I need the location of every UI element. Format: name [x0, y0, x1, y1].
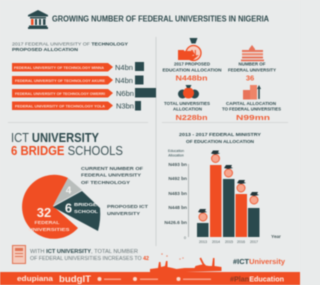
- icon: certificate: [12, 246, 26, 264]
- row: Yola: [12, 101, 141, 110]
- slice: 6 bridge school: [53, 191, 100, 231]
- y axis: N426.6 bn: [164, 220, 187, 226]
- heading: technology allocation: 2017 FEDERAL UNIVERSITY OF TECHNOLOGY: [12, 42, 129, 48]
- stat: capital allocation: TO FEDERAL UNIVERSITIES: [222, 106, 281, 112]
- row: Owerri: N6bn: [116, 89, 134, 98]
- y axis: Education: [168, 149, 184, 153]
- stat: number of federal university: NUMBER OF: [238, 62, 266, 66]
- pie chart: bridge schools: UNIVERSITIES: [28, 227, 70, 232]
- row: Minna: N4bn: [115, 63, 133, 72]
- x axis labels: Year: [271, 234, 281, 239]
- hashtag: ICT University: #ICTUniversity: [233, 259, 285, 266]
- y axis: N493 bn: [168, 162, 187, 168]
- row: Akure: FEDERAL UNIVERSITY OF TECHNOLOGY AKURE: [15, 79, 106, 83]
- icon: hand with money bag: N: [191, 49, 197, 58]
- callout: total federal universities increases to 42: OF FEDERAL UNIVERSITIES INCREASES TO 42: [30, 256, 149, 262]
- bars: [197, 165, 260, 237]
- callout: total federal universities increases to 42: [12, 246, 149, 264]
- chart title: OF EDUCATION ALLOCATION: [186, 139, 255, 145]
- icon: money stacks and arrow: [243, 85, 261, 100]
- footer logos: edupiana: [17, 276, 53, 283]
- icon: government building: [28, 10, 48, 29]
- stat: capital allocation: CAPITAL ALLOCATION: [226, 101, 276, 106]
- y axis: 0: [184, 236, 186, 240]
- stat: capital allocation: N99mn: [236, 115, 270, 122]
- label: proposed ICT university: PROPOSED ICT: [107, 204, 148, 210]
- y axis: N492 bn: [168, 176, 187, 182]
- icon: university building: [241, 45, 264, 61]
- footer crowd silhouette: [150, 253, 222, 273]
- footer logos: [17, 274, 91, 285]
- x axis labels: 2015: [225, 240, 233, 244]
- slice: 32 federal universities: [22, 175, 78, 239]
- subheading: proposed allocation: PROPOSED ALLOCATION: [12, 47, 79, 53]
- stat: total universities allocation: TOTAL UNIVERSITIES: [164, 101, 210, 106]
- pie chart: bridge schools: FEDERAL: [34, 220, 60, 225]
- chart title: [179, 132, 262, 145]
- row: Owerri: [12, 88, 156, 98]
- y axis: N448 bn: [168, 205, 187, 211]
- footer bar: [0, 272, 300, 285]
- row: Yola: N3bn: [116, 102, 134, 110]
- label: proposed ICT university: [107, 204, 148, 217]
- stat: number of federal university: [228, 45, 276, 82]
- title: GROWING NUMBER OF FEDERAL UNIVERSITIES IN NIGERIA: [52, 14, 269, 24]
- y axis: [164, 149, 188, 240]
- x axis labels: 2014: [212, 240, 220, 244]
- hashtag: Plan Education: #PlanEducation: [230, 274, 284, 284]
- stat: number of federal university: 36: [246, 74, 254, 82]
- icons: graduation money bags: [198, 150, 259, 221]
- stat: total universities allocation: [164, 85, 210, 122]
- y axis: N483 bn: [168, 191, 187, 197]
- panel: key statistics: [162, 38, 281, 122]
- stat: total universities allocation: N228bn: [176, 115, 208, 122]
- x axis labels: 2017: [250, 240, 258, 244]
- stat: proposed education allocation: N448bn: [176, 76, 208, 82]
- label: current number of technology universities: [81, 166, 143, 186]
- label: current number of technology universities: FEDERAL UNIVERSITY: [81, 172, 142, 178]
- label: current number of technology universities: OF TECHNOLOGY: [81, 180, 131, 186]
- pie chart: bridge schools: [22, 175, 100, 239]
- callout: total federal universities increases to 42: WITH ICT UNIVERSITY , TOTAL NUMBER: [30, 249, 138, 255]
- pie chart: bridge schools: SCHOOL: [74, 209, 98, 215]
- label: proposed ICT university: UNIVERSITY: [107, 211, 141, 217]
- pie chart: bridge schools: BRIDGE: [74, 202, 98, 208]
- icon: money bags: [178, 85, 199, 98]
- x axis labels: [199, 234, 281, 244]
- row: Yola: FEDERAL UNIVERSITY OF TECHNOLOGY YOLA: [15, 104, 106, 108]
- heading: ICT University 6 bridge schools: 6 BRIDGE SCHOOLS: [11, 144, 123, 158]
- stat: total universities allocation: ALLOCATION: [173, 106, 202, 112]
- y axis: Allocation: [168, 154, 184, 158]
- pie chart: bridge schools: 32: [37, 205, 51, 220]
- bar chart: education allocation 2013-2017: [164, 132, 281, 244]
- footer logos: budgIT: [59, 274, 91, 285]
- slice: 4: [53, 178, 82, 206]
- x axis labels: 2013: [199, 240, 207, 244]
- row: Minna: FEDERAL UNIVERSITY OF TECHNOLOGY MINNA: [14, 66, 105, 70]
- row: Akure: N4bn: [115, 76, 133, 85]
- x axis labels: 2016: [237, 240, 245, 244]
- footer social links: [98, 277, 211, 281]
- stat: proposed education allocation: 2017 PROPOSED: [174, 62, 210, 66]
- row: Owerri: FEDERAL UNIVERSITY OF TECHNOLOGY OWERRI: [15, 92, 105, 96]
- pie chart: bridge schools: 4: [66, 186, 72, 196]
- stat: capital allocation: [222, 85, 281, 122]
- heading: ICT University 6 bridge schools: [11, 131, 123, 158]
- row: Akure: [12, 76, 144, 85]
- label: current number of technology universities: CURRENT NUMBER OF: [81, 166, 143, 172]
- stat: number of federal university: FEDERAL UNIVERSITY: [228, 68, 276, 72]
- chart title: 2013 - 2017 FEDERAL MINISTRY: [179, 132, 262, 138]
- panel: technology university allocation: [12, 42, 156, 110]
- row: Minna: [12, 62, 144, 72]
- stat: proposed education allocation: [162, 38, 222, 82]
- pie chart: bridge schools: 6: [65, 200, 72, 216]
- stat: proposed education allocation: EDUCATION ALLOCATION: [162, 68, 222, 72]
- heading: ICT University 6 bridge schools: ICT UNIVERSITY: [11, 131, 100, 145]
